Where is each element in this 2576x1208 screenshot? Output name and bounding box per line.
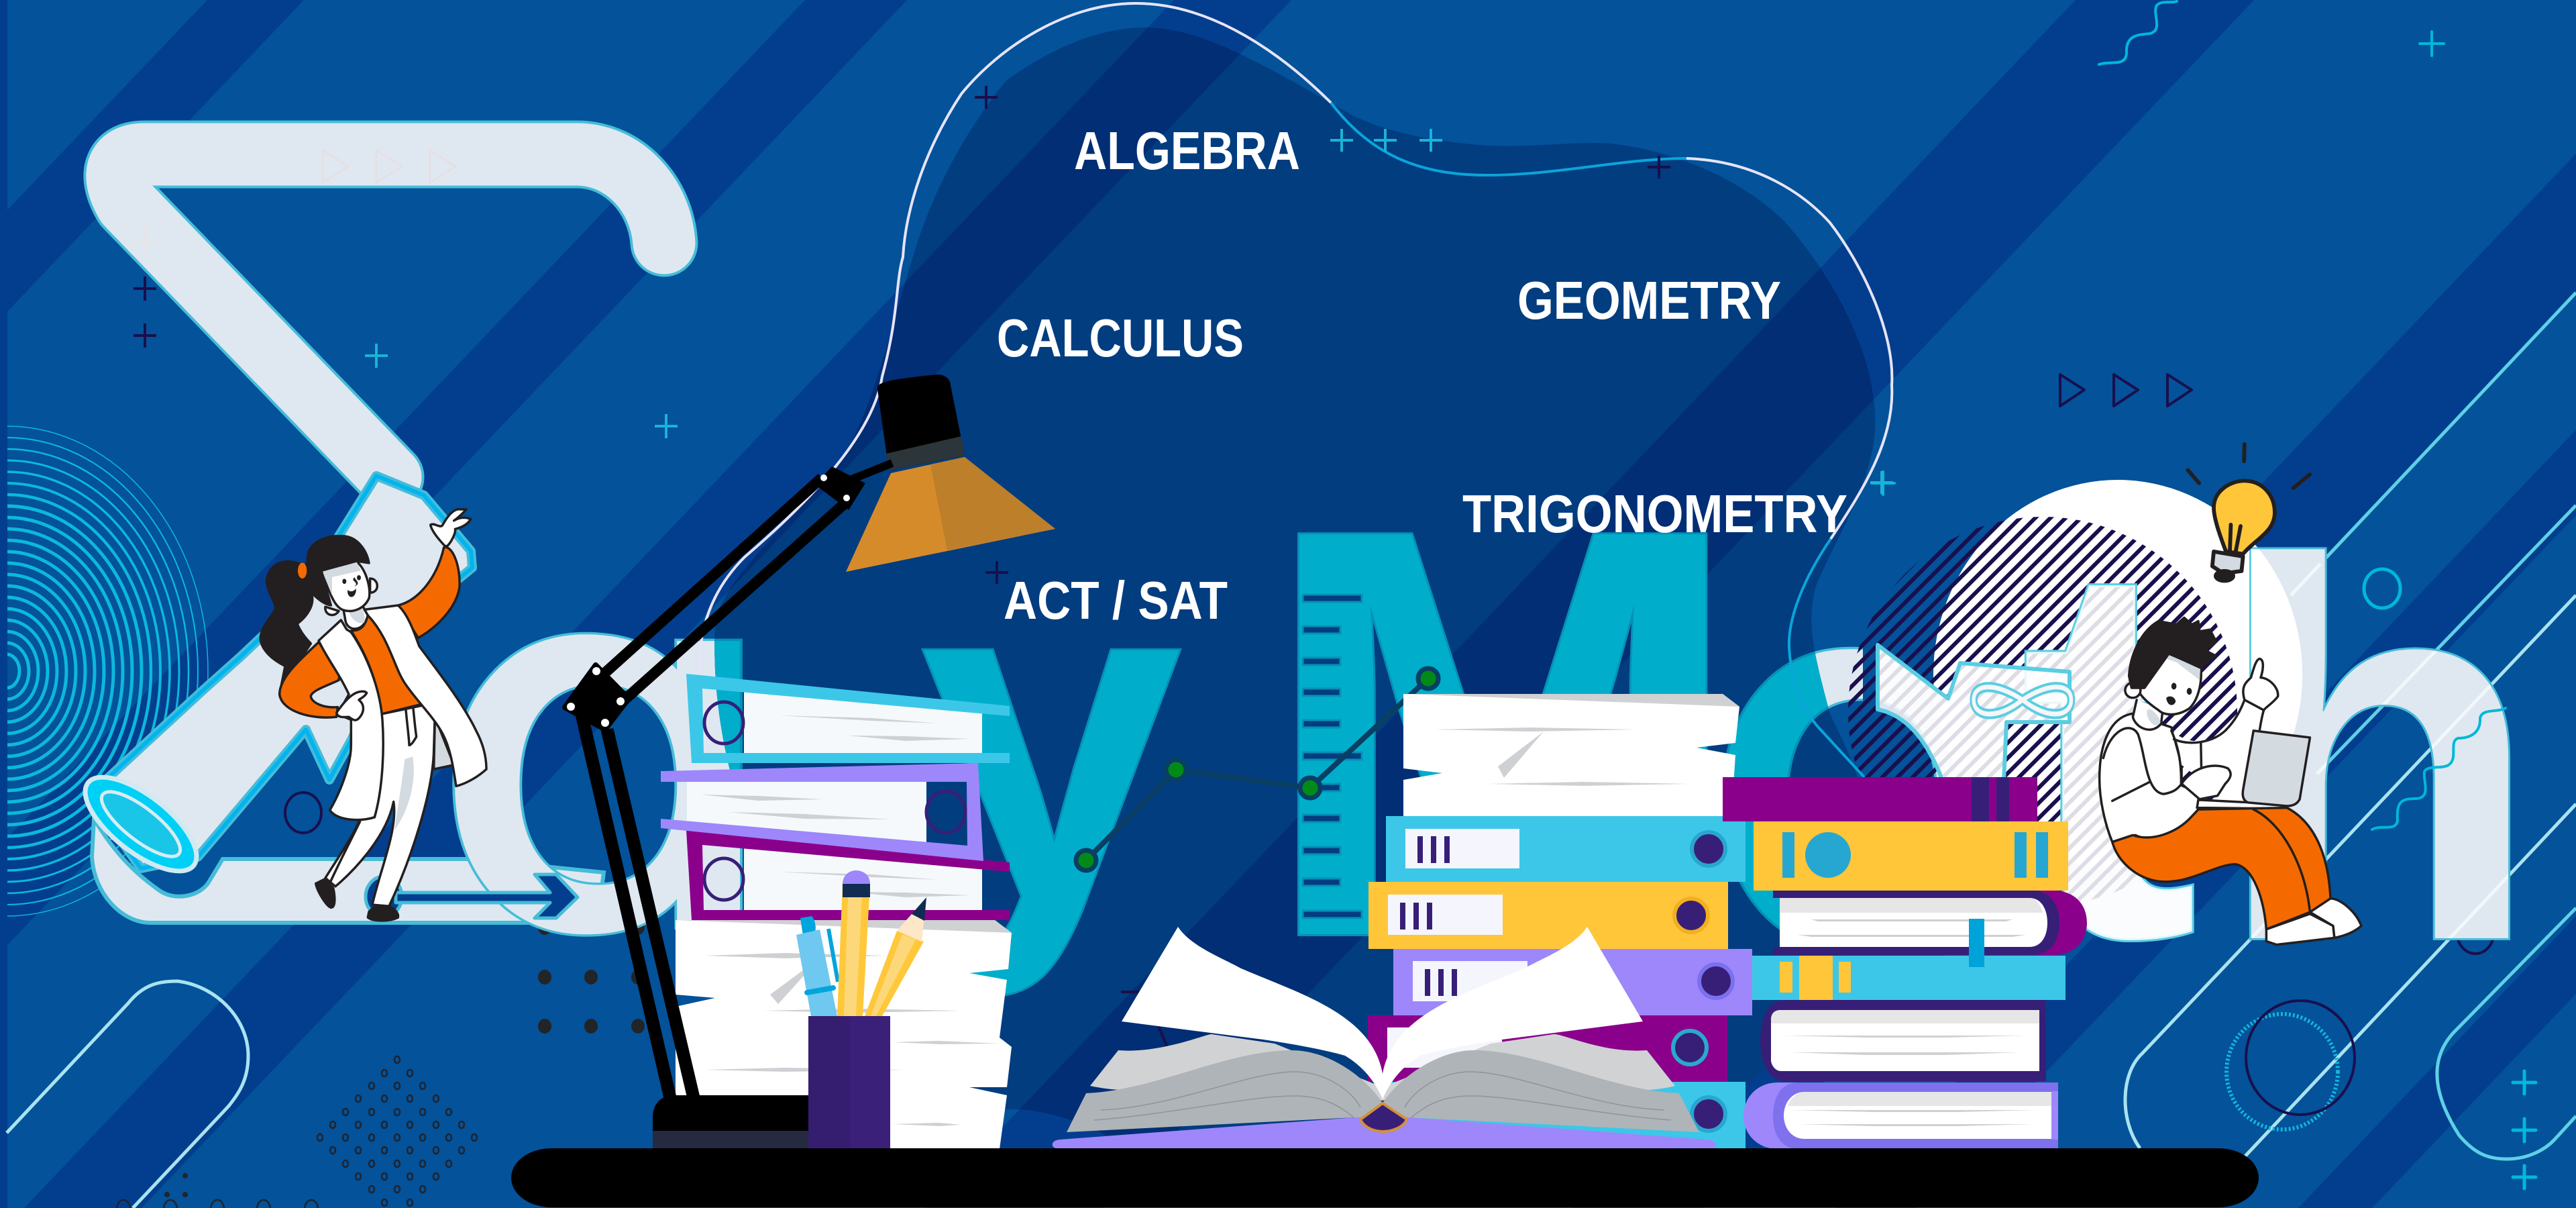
label (1387, 1027, 1502, 1068)
book navy (1760, 1000, 2046, 1081)
label: calculus: CALCULUS (997, 308, 1244, 368)
torso (351, 615, 427, 714)
plus marks in blob (975, 86, 1893, 584)
pencil slanted (865, 897, 926, 1016)
small plus marks left (133, 230, 678, 438)
page lines (1094, 1072, 1671, 1120)
eyes and mouth (2166, 683, 2192, 705)
trouser shadow (394, 756, 414, 830)
top right squiggle and marks (1872, 1, 2536, 1189)
hole (1673, 1031, 1707, 1064)
binder yellow (1368, 882, 1728, 949)
y teal: y (920, 474, 1185, 1001)
dark dot grid (538, 920, 645, 1034)
laptop base (2197, 800, 2287, 809)
navy triangles (2060, 374, 2192, 406)
diagonal line decoration right (2125, 293, 2576, 1161)
trouser detail (331, 709, 417, 880)
sigma symbol shape (117, 154, 664, 477)
head hair (303, 536, 369, 605)
pencil straight (837, 870, 870, 1016)
book yellow (1754, 821, 2068, 891)
desk (511, 1148, 2259, 1207)
filament and rays (2188, 444, 2310, 552)
small marks bottom left (117, 1173, 318, 1208)
hair (2129, 617, 2216, 688)
first letter a: ɑ (431, 456, 784, 1040)
book violet (1743, 1083, 2058, 1149)
trouser seam (2253, 809, 2310, 912)
woman figure (260, 509, 486, 921)
back shoe (316, 879, 335, 907)
typing hand (2182, 766, 2231, 799)
raised arm outline (2174, 700, 2264, 770)
neck (343, 605, 368, 629)
letter a stem and flag overlay (1878, 645, 2070, 825)
front shoe (368, 907, 398, 921)
ring (926, 791, 965, 833)
neck shadow (349, 608, 366, 623)
grey page block (1067, 1050, 1699, 1132)
label: trigonometry: TRIGONOMETRY (1462, 484, 1847, 544)
pages (744, 848, 982, 910)
neck fill (2133, 700, 2163, 729)
hole (1692, 1097, 1725, 1131)
torso (2100, 713, 2205, 842)
line chart (1076, 668, 1438, 870)
cover (686, 674, 1010, 763)
bulb cap (2216, 571, 2233, 581)
label bars (1417, 836, 1450, 863)
ears (2125, 683, 2141, 698)
lamp base (653, 1095, 808, 1149)
left paper stack (676, 920, 1012, 1149)
page creases (778, 715, 970, 741)
laptop (2243, 731, 2310, 806)
raised hand (2243, 659, 2278, 710)
left edge strip (0, 0, 7, 1208)
neck shadow (2147, 709, 2161, 725)
ring (704, 858, 743, 900)
diamond of small rings (317, 1056, 477, 1206)
hole (1699, 964, 1733, 998)
label (1413, 961, 1527, 1001)
light bulb (2188, 444, 2310, 581)
back shoe (2310, 899, 2361, 938)
left binder cyan (686, 674, 1010, 763)
letter y: y (920, 474, 1185, 1001)
trousers (2112, 808, 2330, 929)
sleeve lines (2103, 728, 2182, 801)
ruler ticks on M (1303, 595, 1362, 918)
man figure (2100, 617, 2361, 945)
bulb glass (2214, 481, 2275, 554)
pages (687, 782, 926, 843)
label (1405, 829, 1519, 868)
lamp head (846, 374, 1055, 572)
scrunchie (298, 562, 307, 578)
first letter a: ɑ (431, 456, 784, 1040)
ears (325, 578, 377, 615)
letters in light tint (431, 408, 2542, 1058)
second letter a: ɑ (1701, 470, 2041, 1055)
book stack right (1723, 777, 2087, 1149)
bulb base (2212, 552, 2243, 574)
letter t: t (2020, 450, 2198, 1050)
binder violet (1393, 949, 1752, 1015)
hatched circle (1848, 517, 2237, 906)
white circle backdrop (1933, 480, 2302, 869)
back arm (280, 642, 340, 717)
letter h: h (2214, 452, 2542, 1052)
first a teal (714, 639, 743, 769)
label: geometry: GEOMETRY (1517, 270, 1781, 330)
pen (796, 916, 838, 1016)
cover (686, 830, 1010, 920)
left binder violet (661, 763, 983, 861)
M teal: M (1260, 408, 1744, 1058)
central blob (714, 28, 1876, 1136)
binder cyan (1386, 816, 1746, 882)
flying page right (1383, 927, 1643, 1099)
open book (1053, 927, 1716, 1149)
hole (1674, 899, 1708, 932)
rolled paper scroll (70, 476, 472, 888)
rings lower right (2226, 913, 2493, 1129)
eyes nose mouth (342, 575, 361, 597)
letter h inside backdrop: h (2214, 452, 2542, 1052)
arrow on sigma bar (366, 874, 578, 918)
second letter a: ɑ (1701, 470, 2041, 1055)
pencil cup (808, 1016, 890, 1149)
pale lines across letter h (2251, 562, 2509, 938)
page creases (701, 795, 891, 819)
first a teal: ɑ (431, 456, 784, 1040)
first a teal: ɑ (431, 456, 784, 1040)
label bars (1425, 969, 1457, 996)
coat inner (434, 717, 454, 769)
gap in second letter (1863, 624, 2019, 719)
book purple (1723, 777, 2037, 821)
grey sheets (1090, 1034, 1675, 1101)
trousers (325, 704, 435, 906)
raised arm (398, 547, 460, 638)
right paper stack (1403, 694, 1739, 816)
letters in teal inside blob (431, 408, 2041, 1058)
pages (744, 692, 982, 753)
faint triangles on sigma (323, 150, 455, 183)
raised arm fill (2171, 700, 2264, 782)
blob outline line (700, 3, 1892, 777)
face (322, 562, 370, 611)
lamp arms (581, 463, 892, 1101)
ring (704, 702, 743, 744)
navy triangle behind book (1121, 992, 1167, 1047)
squiggle over letter h (2372, 708, 2506, 829)
second a teal: ɑ (1701, 470, 2041, 1055)
forehead shadow (322, 562, 361, 595)
ponytail (260, 562, 313, 689)
page creases (778, 872, 970, 897)
binder purple (1368, 1015, 1727, 1082)
second a teal (1726, 651, 1829, 930)
flying page left (1122, 927, 1383, 1099)
lower hand (337, 691, 367, 720)
infinity symbol (1974, 687, 2072, 714)
navy ring by figure (285, 793, 321, 833)
second a teal: ɑ (1701, 470, 2041, 1055)
sigma lower bar (92, 819, 604, 923)
front shoe (2266, 914, 2334, 945)
forehead shadow (2166, 654, 2200, 680)
rounded outline lower left (7, 981, 248, 1208)
concentric circles (0, 426, 208, 916)
face (2137, 654, 2201, 715)
letter M: M (1260, 408, 1744, 1058)
label (1388, 895, 1503, 935)
coat right panel (364, 605, 486, 786)
cover (661, 763, 983, 861)
book cyan (1752, 956, 2065, 1000)
raised hand (431, 509, 471, 546)
spine (1360, 1103, 1407, 1131)
label bars (1400, 903, 1432, 929)
left binder purple (686, 830, 1010, 920)
letter t overlay: t (2020, 450, 2198, 1050)
coat left panel (319, 620, 383, 820)
hole (1692, 832, 1725, 866)
neck outline (2133, 700, 2162, 729)
cover (1053, 1117, 1716, 1149)
binder cyan lower (1386, 1082, 1746, 1149)
label: algebra: ALGEBRA (1074, 121, 1300, 181)
book with purple cover (1773, 891, 2087, 967)
label: act sat: ACT / SAT (1004, 570, 1228, 630)
lamp joints (565, 466, 865, 729)
